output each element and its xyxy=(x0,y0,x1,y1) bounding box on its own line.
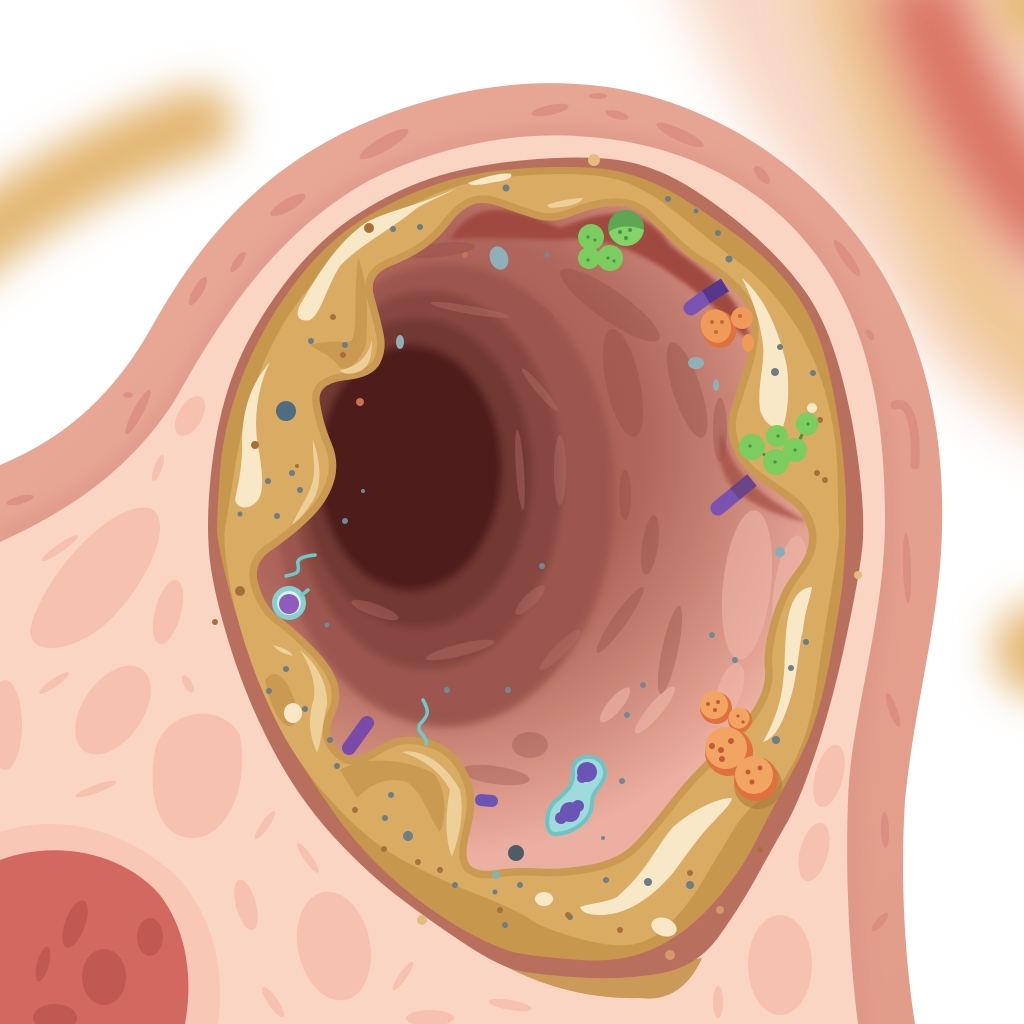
wall cells xyxy=(5,93,915,934)
lumen: floating debris xyxy=(324,244,785,840)
plaque: lower drip xyxy=(505,958,702,999)
microbe: teal squiggle xyxy=(419,700,427,744)
plaque: lipid highlights xyxy=(235,173,817,940)
artery wall: darker mid band xyxy=(0,125,898,1024)
plaque: darker edge around lumen xyxy=(257,203,809,871)
blurred background: red vessel upper right xyxy=(650,0,1024,470)
lumen: pale ring streaks xyxy=(349,299,584,674)
blurred background: tan blob right xyxy=(994,602,1024,698)
plaque: light tan layer xyxy=(224,174,839,945)
lumen: base colour xyxy=(257,203,809,871)
microbe: teal ring left xyxy=(274,555,315,618)
blurred background: tan streak upper left xyxy=(0,122,200,262)
lumen: fold streaks xyxy=(389,239,727,789)
bacteria: green cluster right xyxy=(739,412,818,475)
tissue cells xyxy=(0,391,851,1024)
plaque: brown speckles xyxy=(212,154,862,960)
surrounding pale tissue xyxy=(0,135,885,1024)
bacteria: orange cluster upper right xyxy=(696,305,754,353)
vessel lumen xyxy=(257,203,813,871)
plaque: dark tan layer xyxy=(217,167,846,960)
lumen: concentric rings xyxy=(275,263,615,727)
bacteria: green cluster top xyxy=(578,210,644,271)
plaque: darker inner patches xyxy=(265,258,444,832)
plaque: soft tan highlights xyxy=(273,198,583,857)
bacteria: purple rods xyxy=(349,285,752,801)
lumen: dark red shadow top and upper right xyxy=(450,210,808,522)
small vessel lower left xyxy=(0,824,220,1024)
microbe: dividing cell with teal border xyxy=(547,757,605,834)
bacteria: orange cluster lower right xyxy=(700,691,782,809)
lumen: pale folds lower right xyxy=(595,508,813,737)
plaque: outer reddish rim xyxy=(208,157,863,978)
plaque: blue-grey speckles xyxy=(238,184,816,928)
